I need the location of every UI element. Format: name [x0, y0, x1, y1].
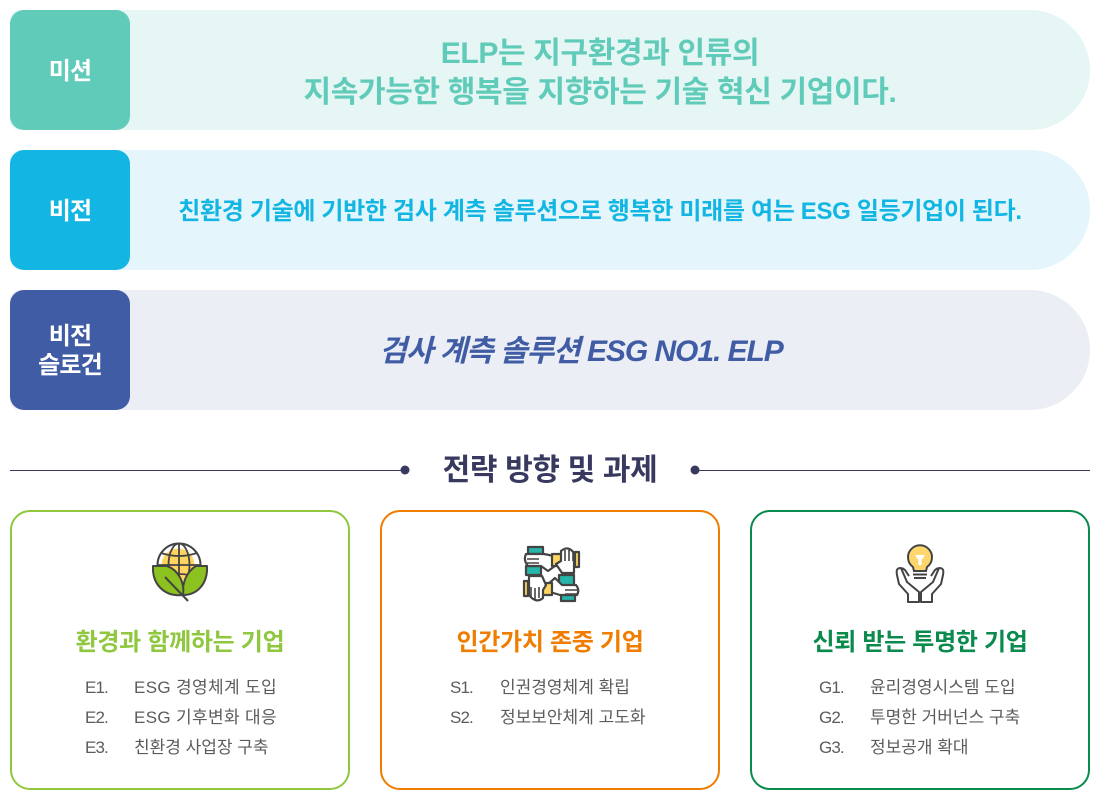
panel: trust	[750, 510, 1090, 790]
task G3: 정보공개 확대	[870, 738, 969, 757]
task E2: E2.	[85, 708, 108, 727]
task E2: ESG 기후변화 대응	[134, 708, 277, 727]
task list	[85, 678, 277, 757]
icon: four linked hands	[522, 546, 580, 602]
icon: globe with leaves	[152, 542, 208, 602]
task list	[450, 678, 645, 727]
task G3	[819, 738, 969, 757]
task G1: G1.	[819, 678, 844, 697]
card title: 환경과 함께하는 기업	[76, 629, 284, 656]
vision statement: 친환경 기술에 기반한 검사 계측 솔루션으로 행복한 미래를 여는 ESG 일등기업이 된다.	[178, 198, 1022, 224]
mission statement: ELP는 지구환경과 인류의	[441, 37, 759, 70]
vision tag	[10, 150, 130, 270]
slogan statement: 검사 계측 솔루션 ESG NO1. ELP	[379, 335, 783, 368]
task S1: S1.	[450, 678, 473, 697]
task G2: 투명한 거버넌스 구축	[870, 708, 1020, 727]
task E3: 친환경 사업장 구축	[134, 738, 269, 757]
panel: vision	[10, 150, 1090, 270]
task S1: 인권경영체계 확립	[500, 678, 630, 697]
task E3: E3.	[85, 738, 108, 757]
task S2: 정보보안체계 고도화	[500, 708, 645, 727]
task G1: 윤리경영시스템 도입	[870, 678, 1015, 697]
task list	[819, 678, 1020, 757]
task G3: G3.	[819, 738, 844, 757]
mission statement: 지속가능한 행복을 지향하는 기술 혁신 기업이다.	[304, 76, 896, 109]
panel: vision slogan	[10, 290, 1090, 410]
task E1: E1.	[85, 678, 108, 697]
icon: light bulb in hands	[896, 544, 944, 603]
slogan tag	[10, 290, 130, 410]
vision tag: 비전	[49, 198, 91, 224]
panel: environment	[10, 510, 350, 790]
section heading: strategy direction and tasks	[10, 454, 1090, 487]
mission statement	[304, 37, 896, 109]
slogan tag: 슬로건	[38, 352, 102, 379]
panel: human value	[380, 510, 720, 790]
card title: 인간가치 존중 기업	[456, 629, 643, 656]
card title: 신뢰 받는 투명한 기업	[812, 629, 1028, 656]
mission tag	[10, 10, 130, 130]
task S2: S2.	[450, 708, 473, 727]
section heading: strategy direction and tasks: 전략 방향 및 과제	[443, 454, 657, 487]
panel: mission	[10, 10, 1090, 130]
task G2: G2.	[819, 708, 844, 727]
mission tag: 미션	[49, 58, 91, 84]
task E1: ESG 경영체계 도입	[134, 678, 277, 697]
slogan tag: 비전	[49, 323, 91, 350]
